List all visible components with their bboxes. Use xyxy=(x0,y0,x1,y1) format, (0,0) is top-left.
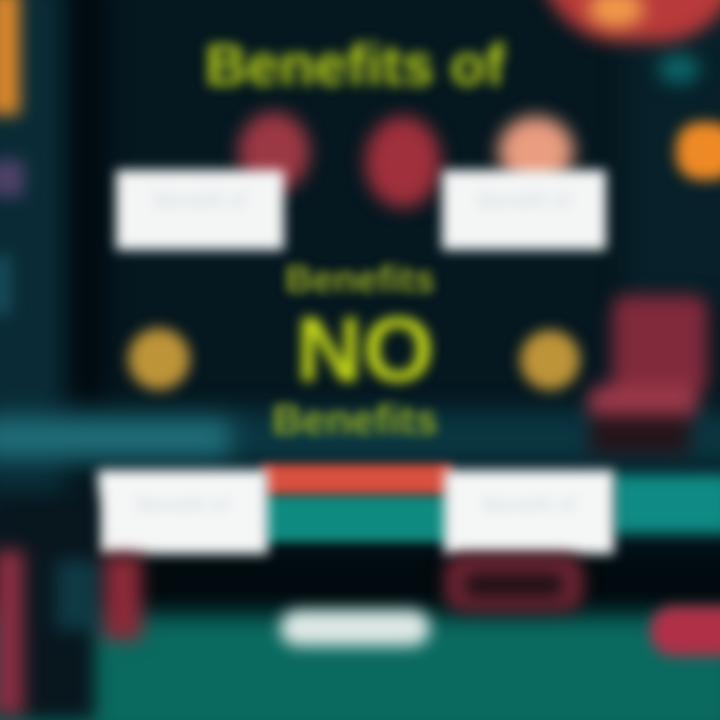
right teal block xyxy=(612,474,720,534)
panel: top right xyxy=(442,170,606,250)
bottom centre label xyxy=(280,610,430,646)
panel: bottom left: Benefit of xyxy=(137,492,229,517)
title: Benefits of xyxy=(205,33,505,98)
dark red shape under right panel xyxy=(434,540,594,622)
panel: bottom right xyxy=(444,470,614,554)
icon: left red circle xyxy=(238,112,310,192)
top right decorative shape xyxy=(536,0,720,93)
orange badge xyxy=(676,122,720,180)
icon: left gold circle xyxy=(128,328,190,390)
icon: right peach circle xyxy=(498,116,574,186)
panel: top left: Benefit of xyxy=(154,188,246,213)
icon: right gold circle xyxy=(520,330,580,390)
panel: top left xyxy=(116,170,284,250)
centre banner xyxy=(255,456,459,549)
subheading lower: Benefits xyxy=(272,396,438,443)
panel: bottom left xyxy=(98,470,268,554)
bottom left figure xyxy=(0,486,155,720)
panel: bottom right: Benefit of xyxy=(483,492,575,517)
right red figure xyxy=(576,282,720,460)
panel: top right: Benefit of xyxy=(478,188,570,213)
subheading: Benefits xyxy=(285,259,435,301)
bottom right red shape xyxy=(650,606,720,656)
left edge decorations xyxy=(0,0,33,320)
big number: NO xyxy=(296,299,434,401)
icon: centre red circle xyxy=(365,116,441,208)
